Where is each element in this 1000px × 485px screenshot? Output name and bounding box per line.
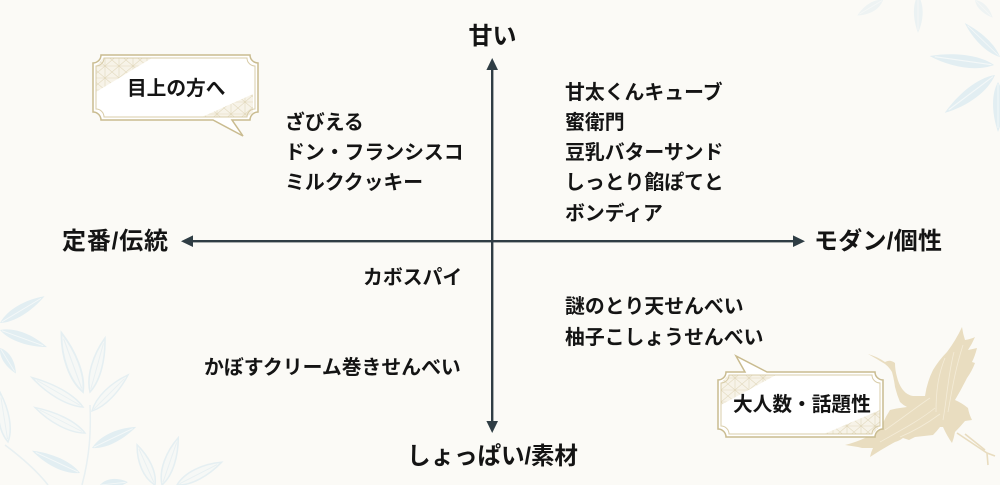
axis label: left: 定番/伝統 bbox=[62, 228, 168, 255]
quadrant list: top right bbox=[565, 81, 724, 225]
quadrant list: top right: 豆乳バターサンド bbox=[565, 142, 723, 164]
quadrant list: top right: ボンディア bbox=[565, 202, 663, 225]
bamboo leaves: bottom left bbox=[0, 291, 224, 485]
quadrant list: top right: 甘太くんキューブ bbox=[565, 81, 723, 104]
axis label: bottom: しょっぱい/素材 bbox=[407, 443, 578, 470]
quadrant list: bottom right: 柚子こしょうせんべい bbox=[565, 327, 763, 349]
quadrant list: top right: しっとり餡ぽてと bbox=[565, 171, 724, 194]
quadrant list: bottom right: 謎のとり天せんべい bbox=[565, 296, 744, 318]
quadrant list: top left: ドン・フランシスコ bbox=[285, 142, 464, 164]
quadrant list: bottom left: かぼすクリーム巻きせんべい bbox=[204, 357, 461, 379]
icon: golden crane bbox=[845, 327, 995, 465]
bamboo leaves: top right bbox=[855, 0, 1000, 132]
callout: for superiors: 目上の方へ bbox=[127, 77, 225, 100]
axis label: top: 甘い bbox=[468, 23, 516, 50]
quadrant list: top left: ざびえる bbox=[285, 111, 364, 134]
callout: for large groups and talk value bbox=[718, 356, 883, 437]
quadrant list: bottom left: カボスパイ bbox=[363, 267, 462, 289]
axis label: right: モダン/個性 bbox=[814, 227, 942, 255]
quadrant list: top left bbox=[285, 111, 464, 194]
horizontal axis: traditional to modern bbox=[181, 235, 805, 247]
quadrant list: bottom left bbox=[204, 267, 462, 379]
quadrant list: bottom right bbox=[565, 296, 763, 349]
vertical axis: sweet to salty bbox=[486, 58, 498, 433]
callout: for superiors bbox=[93, 55, 258, 136]
quadrant list: top left: ミルククッキー bbox=[285, 172, 423, 194]
quadrant list: top right: 蜜衛門 bbox=[565, 112, 625, 134]
callout: for large groups and talk value: 大人数・話題性 bbox=[733, 394, 871, 416]
